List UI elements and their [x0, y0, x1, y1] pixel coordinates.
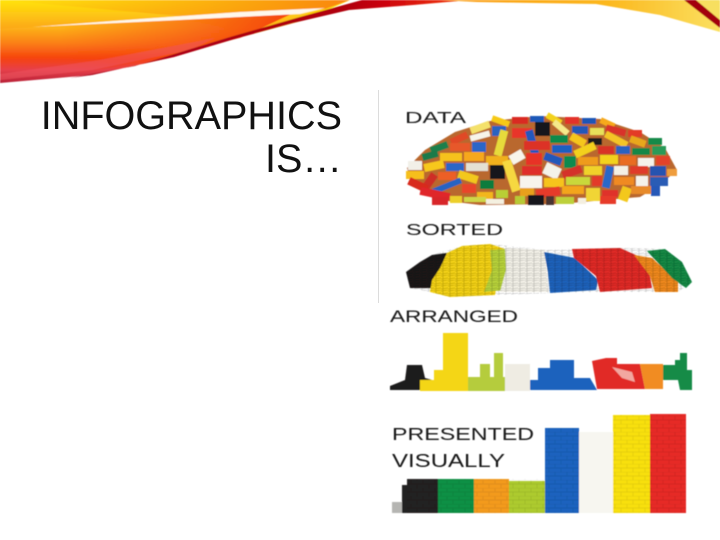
label: ARRANGED: ARRANGED	[390, 307, 518, 326]
title	[41, 94, 342, 181]
label: DATA: DATA	[405, 110, 467, 127]
title: INFOGRAPHICS	[41, 94, 342, 138]
picture: sorted bricks	[406, 222, 692, 297]
label: PRESENTED VISUALLY: VISUALLY	[392, 451, 505, 471]
divider line	[378, 90, 379, 303]
picture: data pile	[405, 110, 677, 205]
picture: presented visually bar chart	[392, 414, 686, 513]
label: SORTED: SORTED	[406, 222, 503, 239]
picture: arranged bricks	[390, 307, 692, 391]
banner: flame swoosh	[0, 0, 720, 83]
title: IS…	[265, 137, 342, 181]
label: PRESENTED VISUALLY	[392, 424, 534, 471]
label: PRESENTED VISUALLY: PRESENTED	[392, 424, 534, 444]
